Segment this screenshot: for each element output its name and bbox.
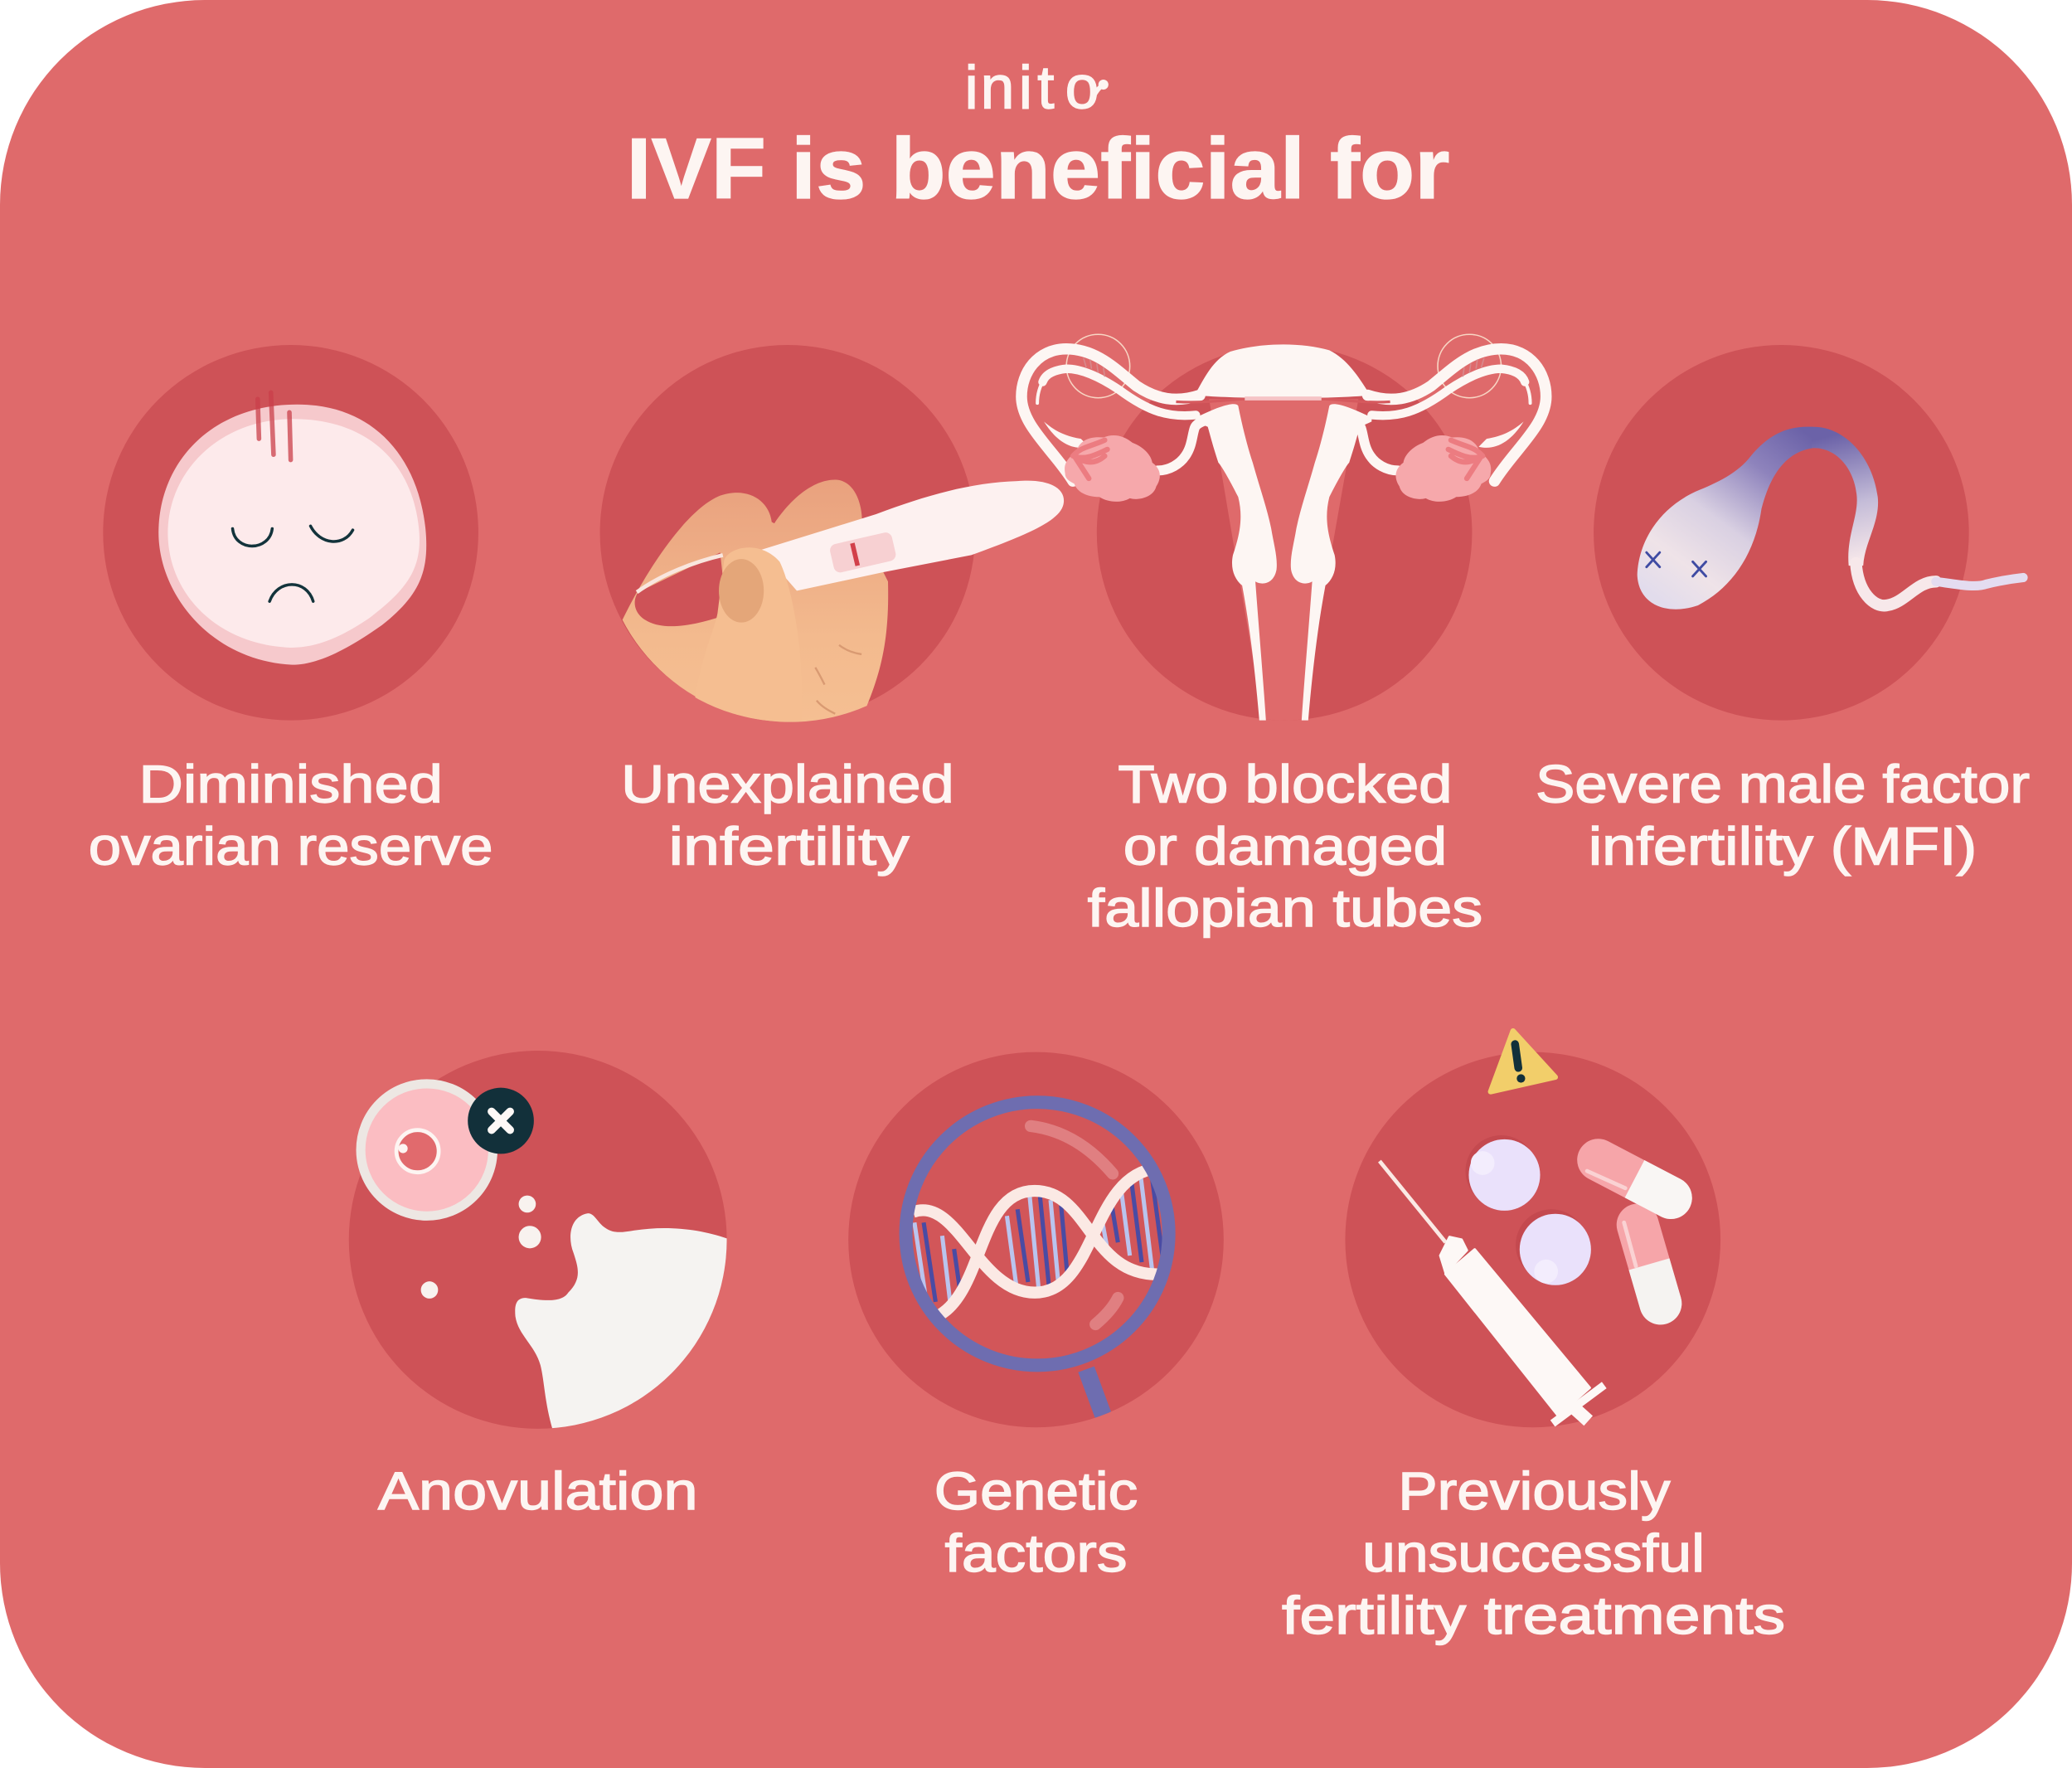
label	[1088, 754, 1482, 938]
icon: circle backdrop	[103, 345, 478, 721]
panel: anovulation	[349, 1051, 740, 1521]
icon: circle backdrop	[349, 1051, 727, 1429]
label: Previously	[1398, 1461, 1671, 1521]
icon: magnifier over DNA	[906, 1102, 1169, 1420]
icon: circle backdrop	[600, 345, 975, 721]
icon: circle backdrop	[1594, 345, 1969, 721]
panel: diminished ovarian reserve	[89, 345, 493, 876]
label: Two blocked	[1118, 754, 1453, 814]
icon: pills	[1465, 1131, 1700, 1329]
title: IVF is beneficial for	[626, 120, 1449, 216]
icon: uterus and tubes	[1021, 334, 1546, 721]
panel: previously unsuccessful fertility treatments	[1282, 1031, 1785, 1645]
label	[1536, 754, 2030, 876]
logo: inito: inito	[964, 54, 1099, 122]
label: or damaged	[1123, 816, 1447, 876]
label: infertility (MFI)	[1589, 816, 1977, 876]
label: factors	[945, 1523, 1127, 1583]
label	[89, 754, 493, 876]
label: Diminished	[138, 754, 443, 814]
label	[934, 1461, 1138, 1583]
label: ovarian reserve	[89, 816, 493, 876]
label: fallopian tubes	[1088, 878, 1482, 938]
label: fertility treatments	[1282, 1586, 1785, 1645]
icon: circle backdrop	[1345, 1052, 1720, 1427]
icon: warning sign	[1491, 1031, 1555, 1091]
label: infertility	[668, 816, 910, 876]
icon: hand holding pregnancy test	[623, 480, 1064, 727]
icon: sperm	[1638, 427, 2023, 610]
label: Severe male factor	[1536, 754, 2030, 814]
icon: circle backdrop	[1097, 345, 1472, 721]
icon: circle backdrop	[848, 1052, 1224, 1427]
panel: severe male factor infertility	[1536, 345, 2030, 876]
label: Anovulation	[378, 1461, 698, 1521]
icon: logo tail dot	[1099, 80, 1109, 90]
label	[621, 754, 954, 876]
panel: blocked fallopian tubes	[1021, 334, 1546, 938]
label: Genetic	[934, 1461, 1138, 1521]
icon: sad egg	[158, 392, 426, 665]
icon: egg with cross and follicle	[361, 1084, 740, 1440]
panel: unexplained infertility	[600, 345, 1064, 876]
panel: genetic factors	[848, 1052, 1224, 1583]
label: unsuccessful	[1362, 1523, 1705, 1583]
label	[1282, 1461, 1785, 1645]
icon: syringe	[1380, 1161, 1604, 1423]
label: Unexplained	[621, 754, 954, 814]
